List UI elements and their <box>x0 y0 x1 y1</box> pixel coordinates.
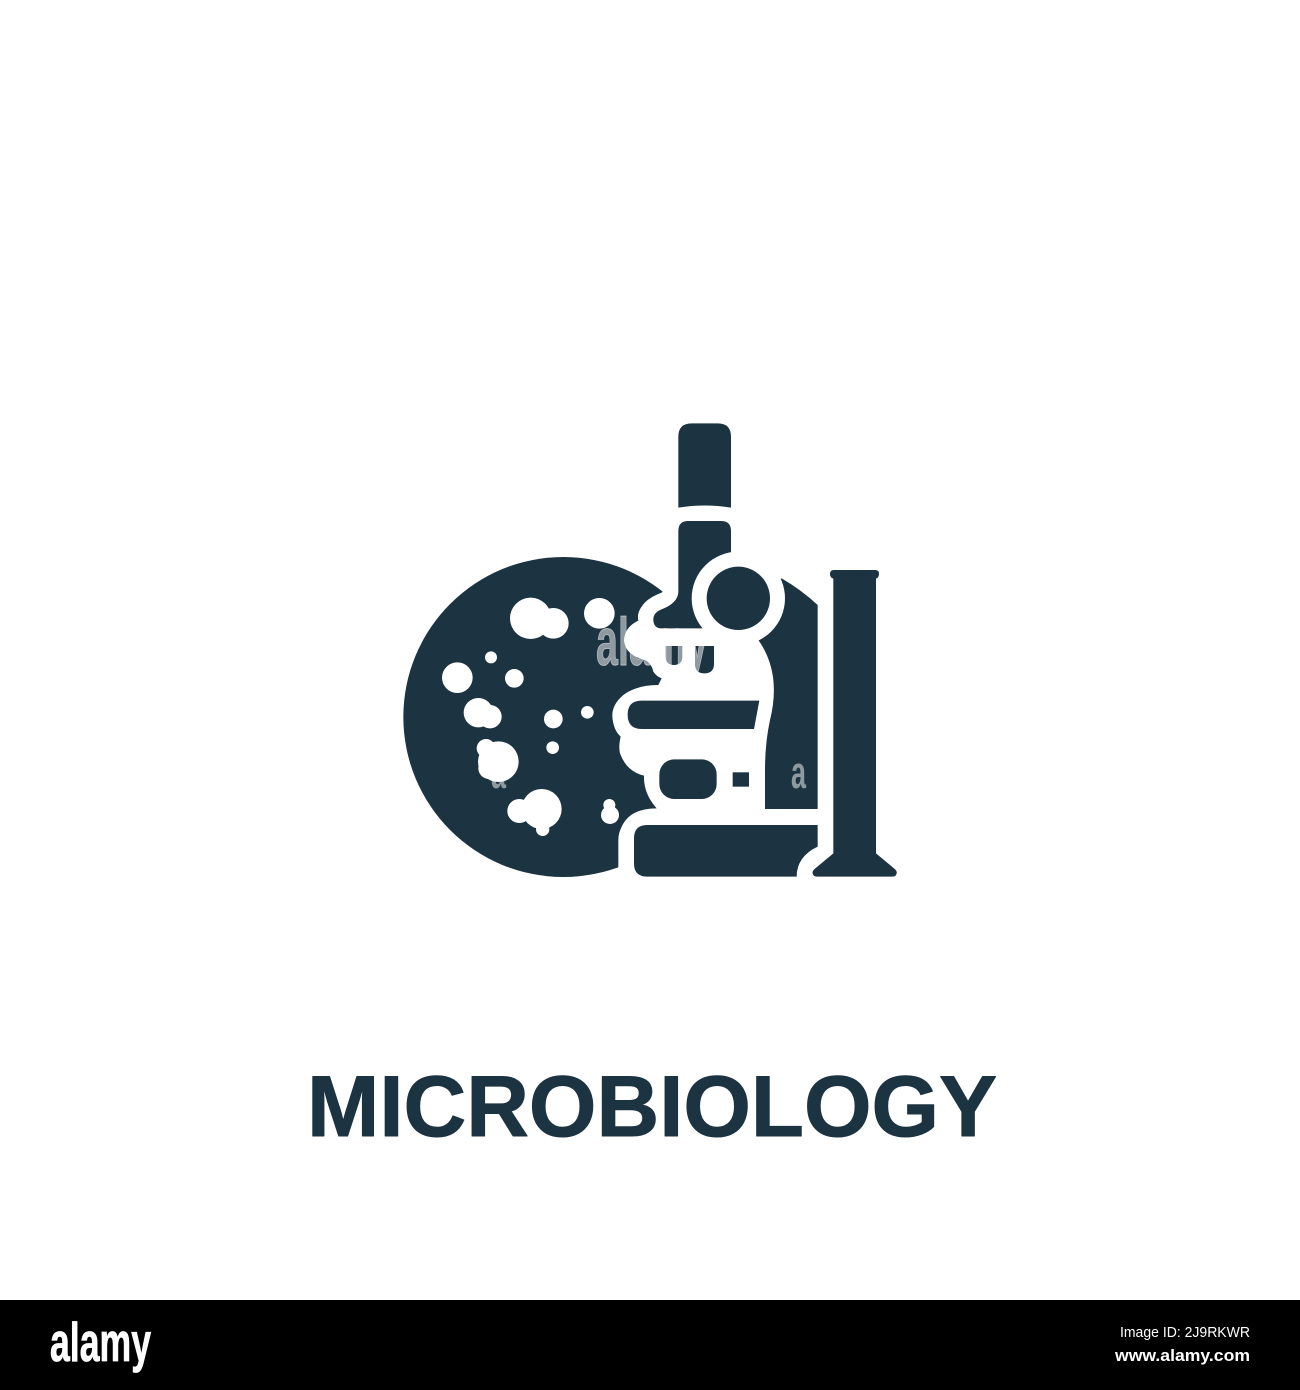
icon: graduated cylinder <box>813 570 897 877</box>
icon: petri dish disc with colonies <box>403 557 723 877</box>
icon: microscope eyepiece <box>678 423 731 508</box>
icon: microscope white silhouette <box>612 577 833 877</box>
watermark: alamy over the icon: a <box>491 747 507 798</box>
icon: microbiology microscope, petri dish and cylinder <box>403 423 897 877</box>
icon: microscope lower knob <box>659 759 717 799</box>
title: MICROBIOLOGY <box>307 1059 997 1155</box>
icon: microscope base <box>634 825 818 877</box>
watermark: alamy over the icon: alamy <box>596 604 708 680</box>
footer logo: alamy <box>50 1311 151 1373</box>
icon: microscope focus wheel <box>692 552 785 645</box>
watermark: alamy over the icon: a <box>791 747 807 798</box>
footer website: www.alamy.com <box>1114 1346 1250 1365</box>
icon: microscope objective lenses <box>666 646 714 673</box>
icon: microscope stage bar <box>628 701 759 729</box>
icon: microscope tube with foot <box>653 521 731 628</box>
footer bar <box>0 1300 1300 1390</box>
watermark: alamy over the icon <box>491 604 807 798</box>
icon: microscope back arm <box>740 578 818 809</box>
footer image id: Image ID: 2J9RKWR <box>1120 1324 1250 1341</box>
icon: microscope small square <box>733 772 749 787</box>
